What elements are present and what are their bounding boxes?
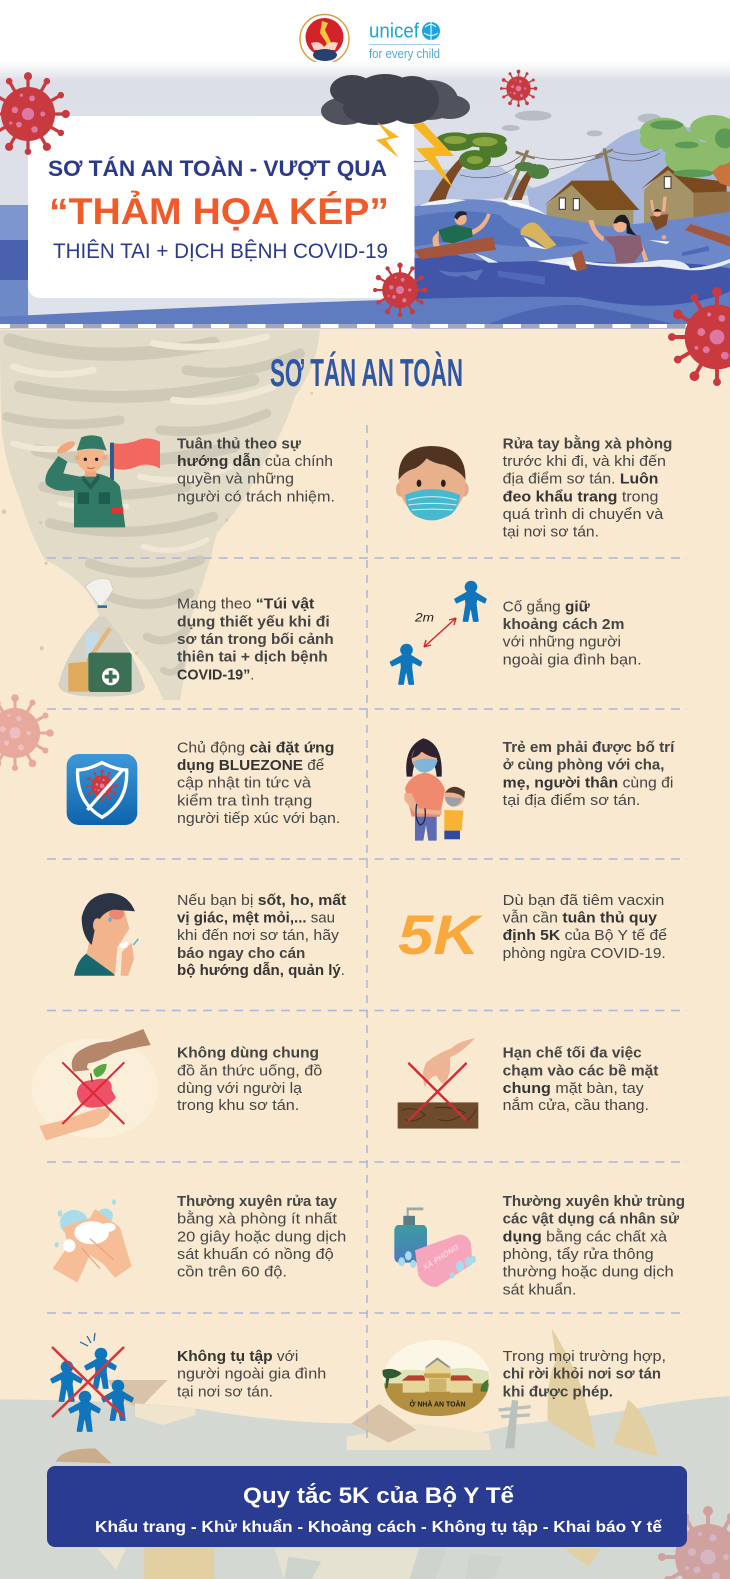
text: item 4: khi đến nơi sơ tán, hãy [177,927,340,944]
white logo strip [0,0,730,64]
text: item 5: trong khu sơ tán. [177,1097,299,1114]
text: item 13: dụng bằng các chất xà [503,1228,668,1246]
text: item 3: người tiếp xúc với bạn. [177,810,340,827]
text: item 1: Tuân thủ theo sự [177,435,301,452]
icon: no touching surfaces [398,1038,478,1129]
text: item 9 [503,598,642,668]
virus: right edge [668,287,730,386]
text: item 3: cập nhật tin tức và [177,775,312,792]
item 14 [382,1340,666,1417]
icon: safe shelter: Ở NHÀ AN TOÀN [409,1400,465,1409]
text: item 3: kiểm tra tình trạng [177,792,312,809]
hero card [28,116,414,298]
logo: unicef [369,20,440,61]
text: item 8: đeo khẩu trang trong [503,488,658,505]
person: child waving [650,197,668,231]
text: item 4: vị giác, mệt mỏi,... sau [177,909,335,926]
text: item 14 [503,1348,666,1400]
text: item 1 [177,435,335,505]
text: item 11: định 5K của Bộ Y tế để [503,927,667,944]
text: item 7: người ngoài gia đình [177,1365,326,1382]
item 1 [45,435,335,527]
text: item 6: bằng xà phòng ít nhất [177,1211,338,1228]
logo: unicef: for every child [369,47,440,61]
text: item 6: 20 giây hoặc dung dịch [177,1228,346,1246]
text: item 4: báo ngay cho cán [177,945,305,962]
text: item 11: Dù bạn đã tiêm vacxin [503,892,664,909]
text: item 12: Hạn chế tối đa việc [503,1044,642,1061]
front water [415,255,730,328]
item 13 [394,1193,685,1298]
storm cloud [321,74,470,125]
text: item 4: Nếu bạn bị sốt, ho, mất [177,892,346,909]
text: item 13: phòng, tẩy rửa thông [503,1246,654,1263]
text: item 3: Chủ động cài đặt ứng [177,739,334,756]
icon: two metre distance: 2m [414,610,434,624]
text: item 12: chạm vào các bề mặt [503,1062,658,1079]
floating debris [521,222,557,249]
icon: man coughing [74,893,138,976]
lightning bolts [376,122,454,188]
banner: 5K rules [47,1466,687,1547]
text: item 6: Thường xuyên rửa tay [177,1193,338,1210]
text: item 1: hướng dẫn của chính [177,453,333,470]
section heading: SƠ TÁN AN TOÀN [270,351,463,395]
background: tornado [0,330,320,700]
title line 3: THIÊN TAI + DỊCH BỆNH COVID-19 [53,240,388,263]
text: item 10: tại địa điểm sơ tán. [503,792,640,809]
text: item 10: mẹ, người thân cùng đi [503,774,673,791]
virus: card corner [373,262,428,317]
item 12 [398,1038,658,1129]
text: item 8: địa điểm sơ tán. Luôn [503,471,658,488]
text: item 9: khoảng cách 2m [503,616,624,633]
text: item 11 [503,892,667,962]
text: item 4: bộ hướng dẫn, quản lý. [177,962,345,979]
icon: soldier saluting [45,435,160,527]
text: item 13 [503,1193,685,1298]
icon: sanitizer and soap [394,1209,476,1287]
title line 2: “THẢM HỌA KÉP” [49,191,389,232]
text: item 10 [503,739,675,809]
text: item 7: Không tụ tập với [177,1348,298,1365]
poles and wires [407,148,660,178]
item 10 [404,738,675,841]
dashed road strip [0,324,730,328]
icon: face with mask [396,446,469,520]
title line 1: SƠ TÁN AN TOÀN - VƯỢT QUA [48,156,387,181]
text: item 7 [177,1348,326,1400]
banner subtitle: Khẩu trang - Khử khuẩn - Khoảng cách - Không tụ tập - Khai báo Y tế [95,1519,662,1536]
icon: Bluezone app [67,754,137,825]
person: man with log [415,211,496,259]
houses [547,183,633,233]
icon: mother and child [404,738,465,841]
text: item 6: sát khuẩn có nồng độ [177,1246,334,1263]
text: item 9: ngoài gia đình bạn. [503,651,642,668]
text: item 2: thiên tai + dịch bệnh [177,649,328,666]
text: item 6 [177,1193,346,1280]
item 4 [74,892,346,979]
banner title: Quy tắc 5K của Bộ Y Tế [243,1483,515,1508]
text: item 2: sơ tán trong bối cảnh [177,631,334,648]
text: item 11: vẫn cần tuân thủ quy [503,909,658,926]
text: item 5: đồ ăn thức uống, đồ [177,1062,322,1079]
text: item 14: khi được phép. [503,1383,613,1400]
icon: hand washing [53,1199,132,1282]
text: item 8: tại nơi sơ tán. [503,524,599,541]
text: item 13: Thường xuyên khử trùng [503,1193,685,1210]
background: faded virus right [658,1506,730,1579]
text: item 8: quá trình di chuyển và [503,506,664,523]
text: item 10: Trẻ em phải được bố trí [503,739,675,756]
text: item 14: Trong mọi trường hợp, [503,1348,666,1365]
item 5 [32,1029,322,1141]
person: woman in water [588,215,648,263]
text: item 10: ở cùng phòng với cha, [503,757,664,774]
icon: no gathering [51,1333,133,1431]
item 9 [391,582,642,684]
logo: emblem [300,14,349,64]
text: item 9: Cố gắng giữ [503,598,590,615]
text: item 1: quyền và những [177,471,294,488]
water [415,199,730,273]
icon: emergency bag [58,578,145,697]
logo: unicef: unicef [369,20,419,42]
icon: two metre distance [391,582,486,684]
hero: flood illustration [0,62,730,328]
text: item 13: các vật dụng cá nhân sử [503,1211,679,1228]
icon: 5K: 5K [398,903,483,966]
text: item 13: sát khuẩn. [503,1281,576,1298]
background: flooded village [0,1328,730,1579]
icon: sanitizer and soap: XÀ PHÒNG [422,1241,460,1273]
item 6 [53,1193,346,1282]
distant clouds and hills [502,111,661,136]
text: item 8 [503,434,672,541]
trees [428,152,472,202]
text: item 8: Rửa tay bằng xà phòng [503,434,672,452]
text: item 12 [503,1044,658,1114]
text: item 6: cồn trên 60 độ. [177,1263,287,1280]
text: item 4 [177,892,346,979]
text: item 9: với những người [503,634,621,651]
text: item 11: phòng ngừa COVID-19. [503,945,666,962]
text: item 3 [177,739,340,827]
text: item 2: Mang theo “Túi vật [177,596,314,613]
item 3 [67,739,340,827]
text: item 14: chỉ rời khỏi nơi sơ tán [503,1365,661,1382]
text: item 8: trước khi đi, và khi đến [503,453,666,470]
virus: top left [0,72,70,155]
text: item 2 [177,596,334,683]
text: item 2: COVID-19”. [177,666,254,683]
text: item 1: người có trách nhiệm. [177,488,335,505]
item 11 [398,892,667,966]
text: item 3: dụng BLUEZONE để [177,757,324,774]
virus: sky [500,70,537,107]
grid dividers [47,425,687,1443]
item 8 [396,434,672,541]
icon: no sharing food [32,1029,158,1141]
text: item 5: Không dùng chung [177,1044,319,1061]
text: item 7: tại nơi sơ tán. [177,1383,273,1400]
text: item 5 [177,1044,322,1114]
text: item 2: dụng thiết yếu khi đi [177,613,330,630]
text: item 13: thường hoặc dung dịch [503,1263,674,1280]
background: faded virus left [0,694,54,771]
item 2 [58,578,334,697]
text: item 5: dùng với người lạ [177,1080,303,1097]
item 7 [51,1333,326,1431]
text: item 12: nắm cửa, cầu thang. [503,1097,649,1114]
text: item 12: chung mặt bàn, tay [503,1080,644,1097]
icon: safe shelter [382,1340,490,1417]
